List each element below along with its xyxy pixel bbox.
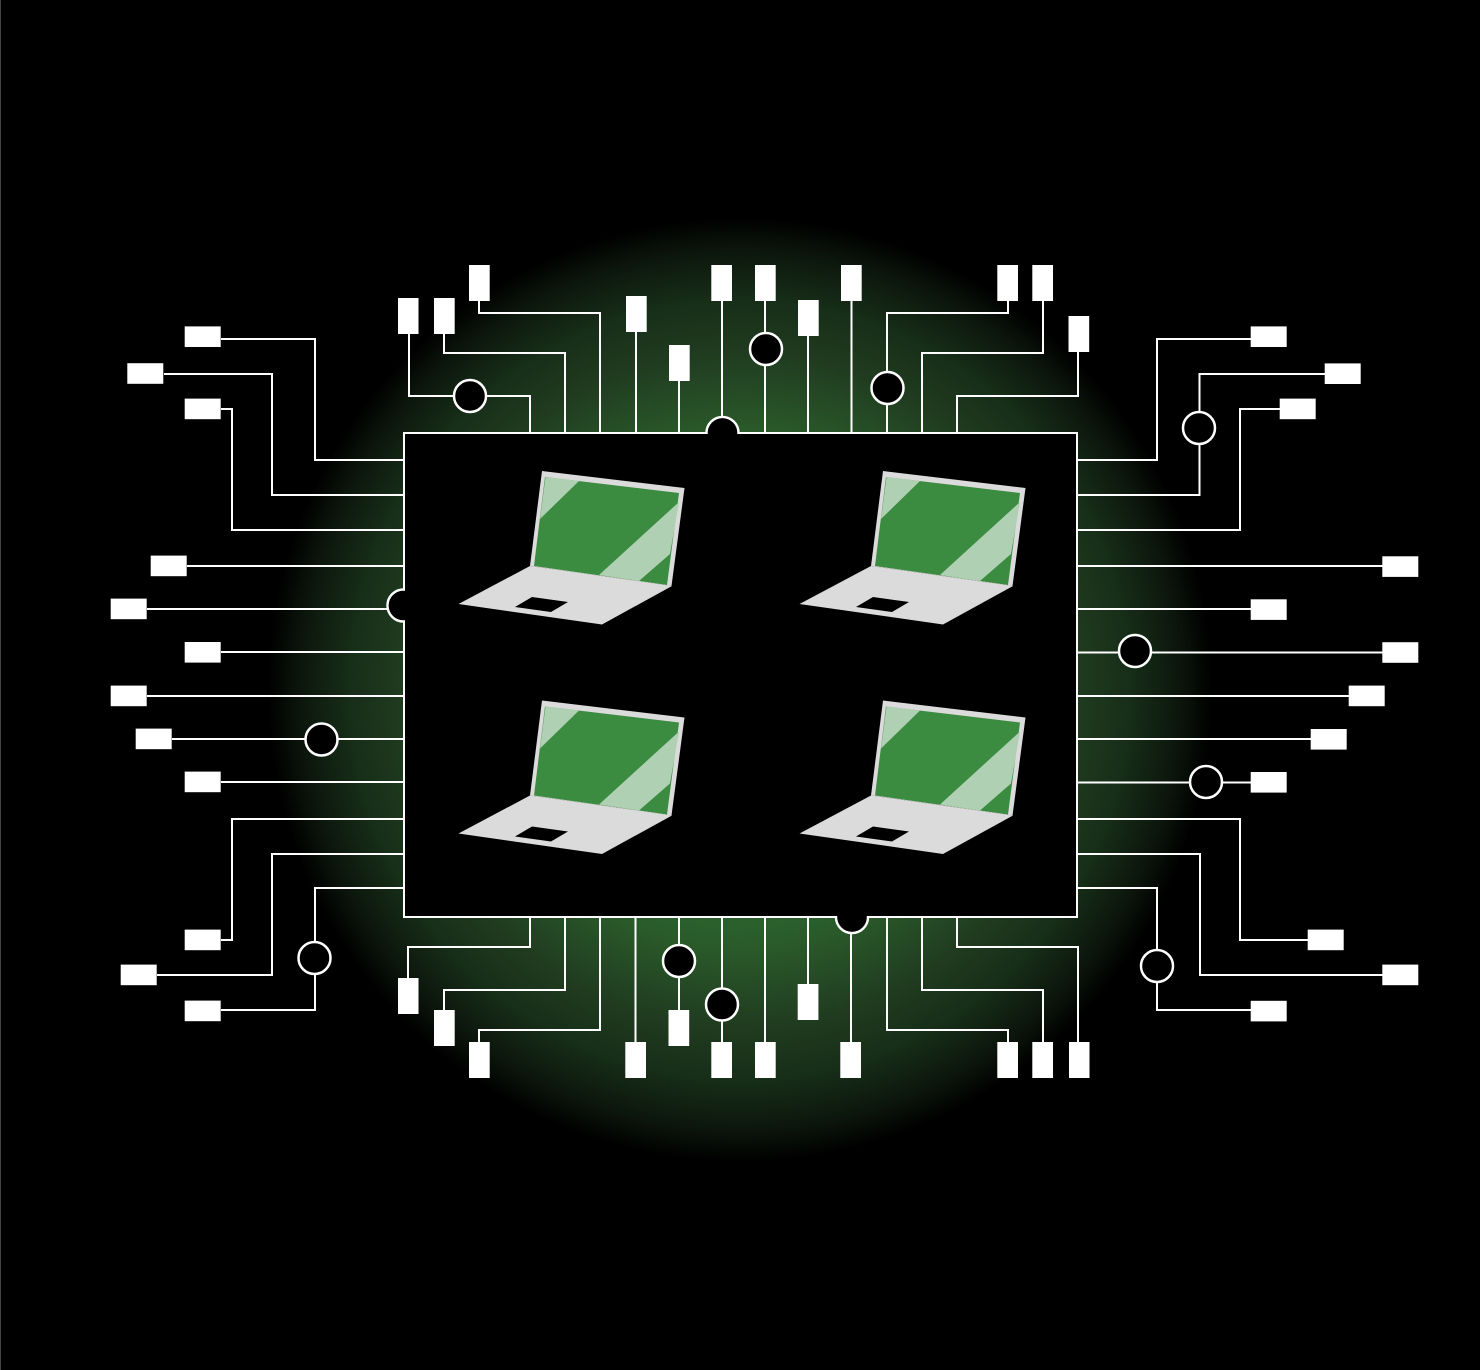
right circuit traces (1077, 326, 1418, 1021)
chip body (404, 433, 1077, 917)
green glow (268, 218, 1212, 1162)
bottom circuit traces (398, 901, 1090, 1078)
top circuit traces (398, 265, 1089, 449)
chip border notches (389, 418, 867, 932)
laptop: bottom left (458, 700, 684, 854)
laptop: top left (458, 471, 684, 624)
left circuit traces (111, 326, 419, 1021)
laptop: top right (800, 471, 1026, 624)
laptop: bottom right (800, 700, 1026, 854)
